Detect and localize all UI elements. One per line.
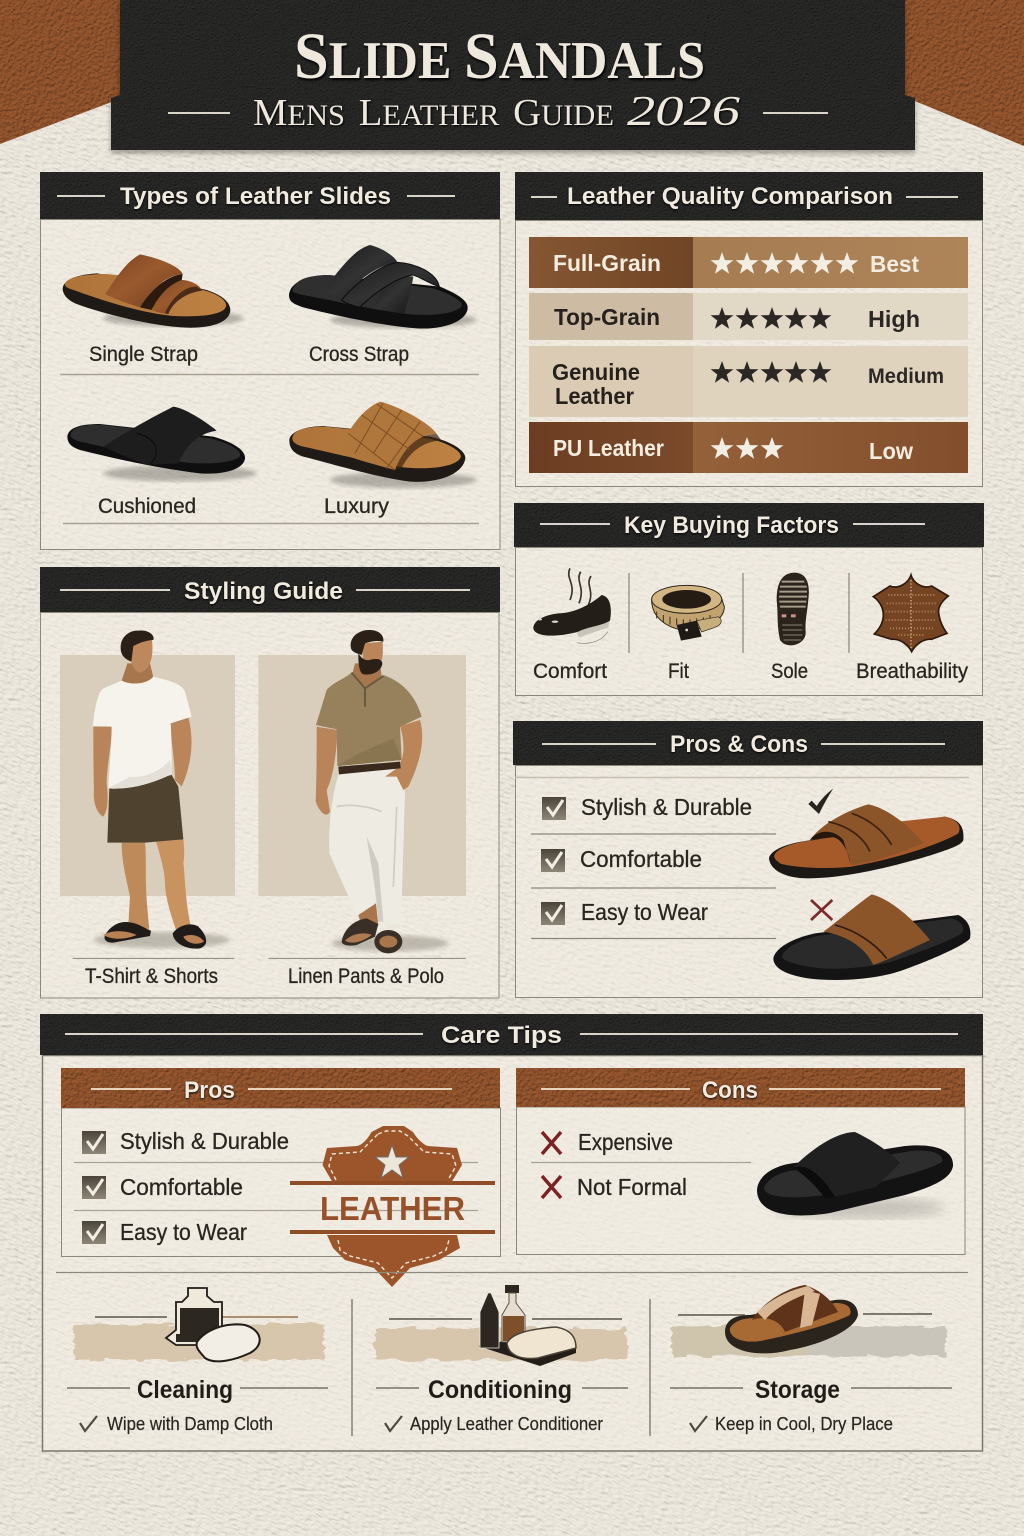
label: comfort: Comfort xyxy=(533,660,607,683)
heading: pros: Pros xyxy=(184,1077,235,1104)
item: expensive: Expensive xyxy=(578,1129,673,1155)
icon: check mark xyxy=(808,788,833,814)
row: top-grain xyxy=(529,293,968,340)
heading: types: Types of Leather Slides xyxy=(120,183,391,210)
row: genuine leather: Leather xyxy=(555,383,634,409)
heading: cons xyxy=(516,1068,965,1107)
label: linen pants and polo: Linen Pants & Polo xyxy=(288,965,444,988)
row: pu leather xyxy=(529,422,968,473)
row: genuine leather: Genuine xyxy=(552,359,640,385)
label: cushioned: Cushioned xyxy=(98,495,196,518)
heading: styling xyxy=(40,567,500,612)
label: fit: Fit xyxy=(668,660,689,683)
figure: t-shirt and shorts xyxy=(60,630,235,949)
label: single strap: Single Strap xyxy=(89,343,198,366)
panel: pros and cons xyxy=(513,721,983,998)
row: genuine leather xyxy=(529,346,968,417)
tip: keep dry: Keep in Cool, Dry Place xyxy=(715,1414,893,1434)
label: sole: Sole xyxy=(771,660,808,683)
heading: care tips xyxy=(40,1014,983,1055)
heading: pros and cons: Pros & Cons xyxy=(670,731,808,758)
sandal: cushioned xyxy=(67,407,257,481)
badge: leather xyxy=(290,1126,495,1287)
sandal: single strap xyxy=(63,254,243,328)
brown leather corner right xyxy=(900,0,1024,146)
row: full-grain: Full-Grain xyxy=(553,250,661,276)
label: cross strap: Cross Strap xyxy=(309,343,409,366)
icon: storage sandal xyxy=(725,1285,858,1353)
row: full-grain xyxy=(529,237,968,288)
panel: leather quality comparison xyxy=(515,172,983,486)
heading: storage: Storage xyxy=(755,1376,840,1404)
item: not formal: Not Formal xyxy=(577,1174,687,1200)
heading: cleaning: Cleaning xyxy=(137,1376,233,1404)
title text: SLIDE SANDALS xyxy=(294,20,705,93)
heading: quality xyxy=(515,172,983,220)
row: pu leather: PU Leather xyxy=(553,435,664,461)
row: top-grain: Top-Grain xyxy=(554,304,660,330)
item: comfortable: Comfortable xyxy=(120,1174,243,1200)
panel: care tips xyxy=(40,1014,983,1451)
subtitle xyxy=(168,89,828,135)
icon: bottles and cloth xyxy=(478,1285,576,1366)
icon: sole xyxy=(777,573,809,645)
row: full-grain: Best xyxy=(870,251,919,277)
heading: care tips: Care Tips xyxy=(441,1022,562,1049)
subtitle: 2026 xyxy=(627,89,740,135)
row: top-grain: High xyxy=(868,306,920,332)
icon: comfort shoe xyxy=(533,568,611,643)
sandal: luxury xyxy=(289,402,477,488)
title banner xyxy=(111,0,915,153)
heading: types xyxy=(40,172,500,219)
item: stylish and durable: Stylish & Durable xyxy=(581,794,752,820)
sandal: brown on brown xyxy=(769,804,963,878)
heading: pros and cons xyxy=(513,721,983,765)
label: t-shirt and shorts: T-Shirt & Shorts xyxy=(85,965,218,988)
panel: types of leather slides xyxy=(40,172,500,550)
icon: bottle and cloth xyxy=(166,1288,260,1361)
subtitle: MENS LEATHER GUIDE xyxy=(253,92,614,134)
panel: styling guide xyxy=(40,567,500,998)
figure: linen pants and polo xyxy=(258,630,466,953)
sandal: brown on black xyxy=(773,894,970,980)
row: genuine leather: Medium xyxy=(868,365,944,388)
panel: key buying factors xyxy=(514,503,984,696)
care: conditioning xyxy=(375,1285,628,1434)
badge: leather: LEATHER xyxy=(320,1190,465,1227)
heading: key buying: Key Buying Factors xyxy=(624,512,839,539)
care: cleaning xyxy=(67,1288,328,1434)
row: pu leather: Low xyxy=(869,438,913,464)
heading: pros xyxy=(61,1068,500,1108)
heading: quality: Leather Quality Comparison xyxy=(567,183,893,210)
item: expensive xyxy=(542,1129,673,1155)
brown leather corner left xyxy=(0,0,125,144)
heading: conditioning: Conditioning xyxy=(428,1376,572,1404)
label: luxury: Luxury xyxy=(324,495,390,518)
item: easy to wear: Easy to Wear xyxy=(120,1219,247,1245)
heading: cons: Cons xyxy=(702,1077,758,1104)
care: storage xyxy=(670,1285,952,1434)
tip: wipe: Wipe with Damp Cloth xyxy=(107,1414,273,1434)
icon: leather hide xyxy=(873,575,948,652)
tip: conditioner: Apply Leather Conditioner xyxy=(410,1414,603,1434)
icon: measuring tape xyxy=(652,585,724,641)
heading: key buying xyxy=(514,503,984,547)
sandals group xyxy=(63,245,477,488)
sandal: black side view xyxy=(757,1132,953,1218)
label: breathability: Breathability xyxy=(856,660,968,683)
item: comfortable: Comfortable xyxy=(580,846,702,872)
sandal: cross strap xyxy=(289,245,477,329)
sub-panel: pros xyxy=(61,1068,500,1256)
sub-panel: cons xyxy=(516,1068,965,1254)
item: easy to wear: Easy to Wear xyxy=(581,899,708,925)
heading: styling: Styling Guide xyxy=(184,578,343,605)
icon: x mark xyxy=(811,900,832,920)
item: stylish and durable: Stylish & Durable xyxy=(120,1128,289,1154)
